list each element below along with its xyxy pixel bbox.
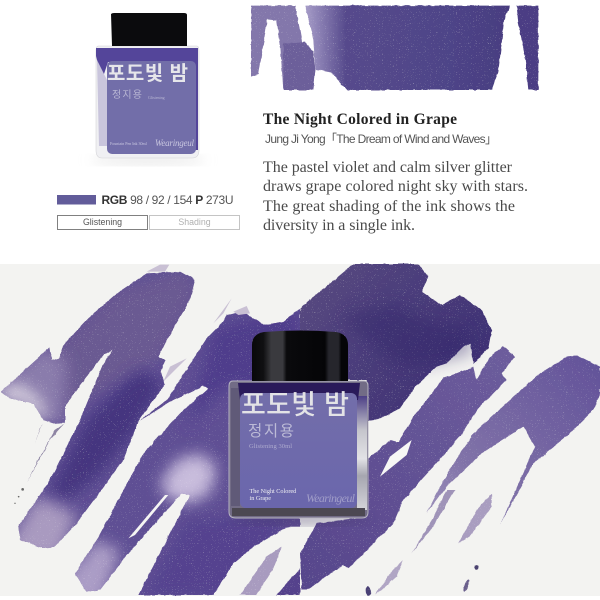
glass left side bbox=[231, 388, 240, 506]
author and source: Jung Ji Yong「The Dream of Wind and Waves」 bbox=[265, 132, 497, 146]
color swatch bbox=[57, 195, 96, 204]
label grade: Glistening bbox=[148, 95, 165, 100]
tone: bloom bbox=[160, 453, 217, 503]
tone: middle end bbox=[75, 534, 126, 592]
paper background bbox=[0, 264, 600, 596]
ink strokes: right bbox=[300, 264, 600, 595]
label brand: Wearingeul bbox=[155, 138, 194, 148]
tone: upper band bbox=[50, 272, 194, 407]
description: The pastel violet and calm silver glitter bbox=[263, 159, 513, 176]
glass right side bbox=[357, 396, 367, 510]
label name: in Grape bbox=[250, 495, 271, 502]
bottle cap bbox=[111, 13, 187, 46]
label brand: Wearingeul bbox=[306, 491, 356, 505]
bottle glass bbox=[96, 46, 199, 158]
description: draws grape colored night sky with stars. bbox=[263, 178, 528, 195]
product bottle: top bbox=[90, 13, 206, 164]
product bottle: main bbox=[229, 330, 370, 524]
description: diversity in a single ink. bbox=[263, 217, 415, 234]
label volume: Fountain Pen Ink 30ml bbox=[110, 141, 148, 146]
pale streaks: top bbox=[147, 265, 250, 382]
ink swatch strip bbox=[251, 6, 538, 90]
label name: The Night Colored bbox=[250, 488, 297, 495]
droplets bbox=[14, 488, 24, 504]
glass left tint bbox=[97, 60, 107, 146]
streak: left drips bbox=[27, 423, 65, 483]
label author: 정지용 bbox=[112, 89, 142, 101]
bottle shadow bbox=[230, 514, 370, 524]
label title: 포도빛 밤 bbox=[241, 390, 349, 420]
heading: The Night Colored in Grape bbox=[263, 111, 457, 128]
tab: glistening bbox=[58, 216, 148, 230]
stroke: far right bbox=[383, 355, 600, 570]
stroke: upper dark bbox=[300, 264, 492, 421]
ink strokes: left bbox=[0, 260, 300, 600]
streak: bottom bbox=[240, 547, 282, 595]
bottle glass bbox=[229, 381, 368, 518]
ink fill bbox=[96, 48, 198, 150]
tone: lower stroke bbox=[144, 519, 289, 595]
glass base bbox=[232, 508, 365, 516]
tone: dark pool bbox=[50, 370, 163, 500]
label title: 포도빛 밤 bbox=[107, 62, 188, 85]
bottle label bbox=[240, 393, 357, 508]
streak: lower bbox=[458, 493, 492, 543]
color codes: RGB 98 / 92 / 154 P 273U bbox=[102, 193, 234, 207]
drops bbox=[366, 586, 371, 595]
tone: lower tip bbox=[18, 490, 82, 548]
stroke: middle bbox=[300, 346, 515, 590]
label grade: Glistening 30ml bbox=[249, 443, 292, 450]
ink base bbox=[0, 260, 300, 597]
tab: shading: Shading bbox=[178, 217, 211, 227]
bottle cap bbox=[252, 330, 348, 381]
description: The great shading of the ink shows the bbox=[263, 198, 515, 215]
tone: upper right bbox=[184, 309, 300, 414]
slit: mid bbox=[380, 440, 412, 477]
label author: 정지용 bbox=[248, 422, 294, 440]
tone: pale lobe edge bbox=[0, 383, 47, 423]
description bbox=[263, 159, 528, 234]
bottle shadow bbox=[90, 156, 206, 164]
tab: shading bbox=[150, 216, 240, 230]
dark shadow band bbox=[340, 303, 473, 367]
ink rim bbox=[238, 383, 360, 400]
tone: lobe bbox=[0, 347, 67, 427]
bottle label bbox=[107, 61, 196, 154]
tab: glistening: Glistening bbox=[83, 217, 122, 227]
slit in stroke bbox=[128, 495, 168, 538]
